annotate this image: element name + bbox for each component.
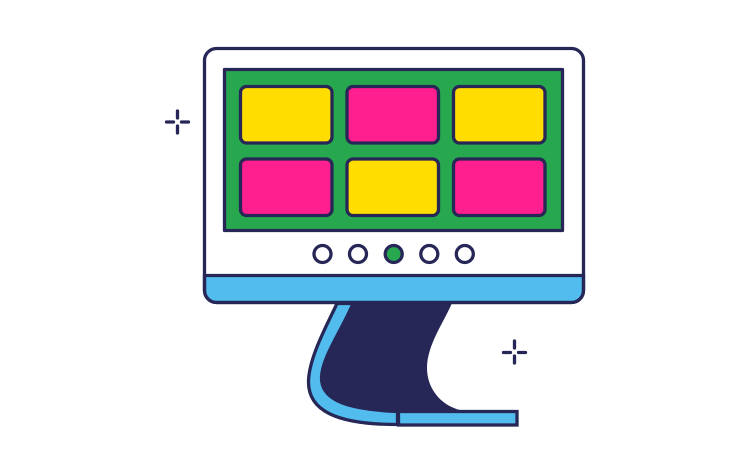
tile: yellow top right: [454, 86, 545, 143]
screen background: [224, 70, 562, 230]
icon: sparkle right: [504, 341, 526, 363]
monitor frame: [204, 48, 584, 302]
tile: pink top middle: [347, 86, 438, 143]
icon: sparkle left: [166, 111, 188, 133]
monitor stand: [308, 303, 517, 425]
monitor blue chin: [204, 276, 584, 302]
dot 5: [456, 246, 473, 262]
dot 4: [421, 246, 438, 262]
dot 2: [350, 246, 366, 262]
tile: pink bottom left: [240, 159, 332, 216]
stand blue edge strip: [308, 304, 398, 424]
monitor outline: [204, 48, 584, 302]
dot 3 active: [385, 246, 402, 262]
tile: yellow bottom middle: [347, 159, 438, 216]
pagination dots: [314, 246, 473, 262]
tile: pink bottom right: [454, 159, 545, 216]
stand dark body: [322, 303, 468, 424]
stand foot: [398, 412, 517, 425]
tile: yellow top left: [240, 86, 332, 143]
monitor body: [204, 48, 584, 302]
screen panel: [224, 70, 562, 230]
dot 1: [314, 246, 331, 262]
